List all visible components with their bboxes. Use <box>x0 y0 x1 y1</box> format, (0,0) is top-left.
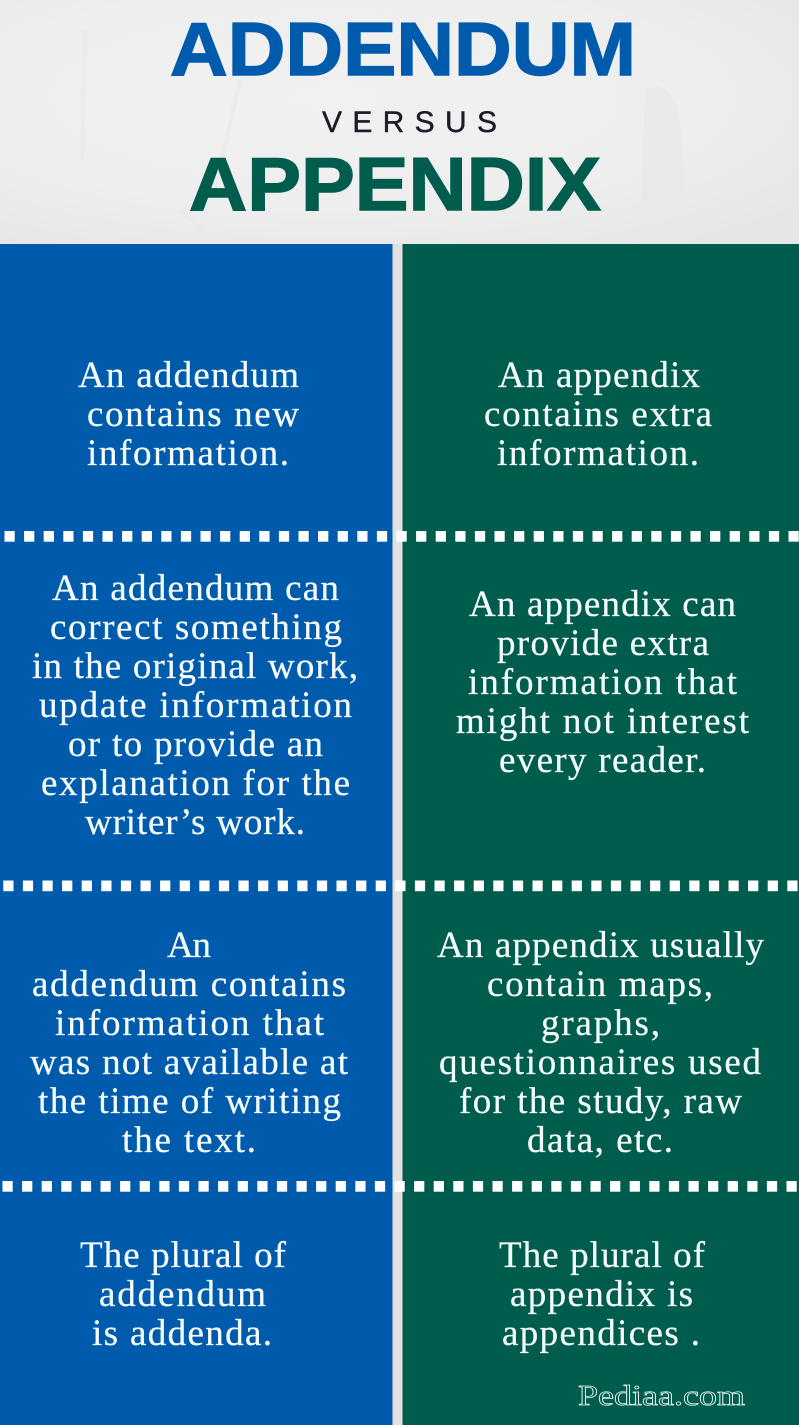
text: appendix point 3: contain maps, <box>487 964 713 1005</box>
text: appendix point 3: data, etc. <box>527 1120 673 1161</box>
text: addendum point 2 <box>32 568 358 843</box>
logo: pediaa.com: Pediaa.com <box>578 1380 746 1412</box>
title: appendix: APPENDIX <box>189 143 601 227</box>
text: appendix point 4: appendix is <box>510 1274 693 1315</box>
text: appendix point 1: information. <box>497 433 699 474</box>
text: appendix point 2: An appendix can <box>469 584 736 625</box>
divider row 1 <box>0 531 799 542</box>
text: addendum point 3: addendum contains <box>32 964 346 1005</box>
text: appendix point 1: An appendix <box>498 355 700 396</box>
text: appendix point 4: appendices . <box>502 1313 700 1354</box>
text: appendix point 4 <box>499 1235 706 1354</box>
text: addendum point 2: update information <box>39 685 352 726</box>
text: appendix point 2: might not interest <box>456 701 750 742</box>
text: addendum point 3: the time of writing <box>38 1081 341 1122</box>
header background <box>0 0 799 244</box>
text: appendix point 2: provide extra <box>497 623 709 664</box>
divider row 2 <box>0 880 799 891</box>
text: addendum point 4: is addenda. <box>92 1313 272 1354</box>
text: addendum point 4: The plural of <box>80 1235 287 1276</box>
text: addendum point 3 <box>30 925 349 1161</box>
text: addendum point 2: An addendum can <box>52 568 339 609</box>
text: appendix point 1 <box>484 355 712 474</box>
text: addendum point 1: information. <box>87 433 289 474</box>
text: addendum point 2: writer’s work. <box>85 802 305 843</box>
text: appendix point 3: for the study, raw <box>459 1081 742 1122</box>
text: addendum point 2: in the original work, <box>32 646 358 687</box>
panel: appendix column <box>402 244 799 1425</box>
text: addendum point 3: the text. <box>122 1120 256 1161</box>
text: appendix point 2: information that <box>468 662 738 703</box>
text: addendum point 3: An <box>167 925 211 966</box>
text: addendum point 3: was not available at <box>30 1042 349 1083</box>
text: addendum point 2: or to provide an <box>68 724 323 765</box>
text: appendix point 1: contains extra <box>484 394 712 435</box>
divider row 3 <box>0 1181 799 1192</box>
text: appendix point 3: questionnaires used <box>439 1042 762 1083</box>
text: appendix point 2: every reader. <box>499 740 706 781</box>
text: appendix point 4: The plural of <box>499 1235 706 1276</box>
text: addendum point 2: correct something <box>50 607 342 648</box>
text: addendum point 1 <box>78 355 299 474</box>
text: appendix point 3: graphs, <box>541 1003 660 1044</box>
title: addendum: ADDENDUM <box>170 8 636 92</box>
subtitle: versus: VERSUS <box>322 106 497 139</box>
text: addendum point 3: information that <box>55 1003 325 1044</box>
text: appendix point 3 <box>437 925 764 1161</box>
text: addendum point 1: An addendum <box>78 355 299 396</box>
panel: addendum column <box>0 244 392 1425</box>
text: addendum point 4: addendum <box>99 1274 266 1315</box>
text: appendix point 2 <box>456 584 750 781</box>
text: appendix point 3: An appendix usually <box>437 925 764 966</box>
text: addendum point 4 <box>80 1235 287 1354</box>
text: addendum point 1: contains new <box>87 394 299 435</box>
text: addendum point 2: explanation for the <box>41 763 350 804</box>
